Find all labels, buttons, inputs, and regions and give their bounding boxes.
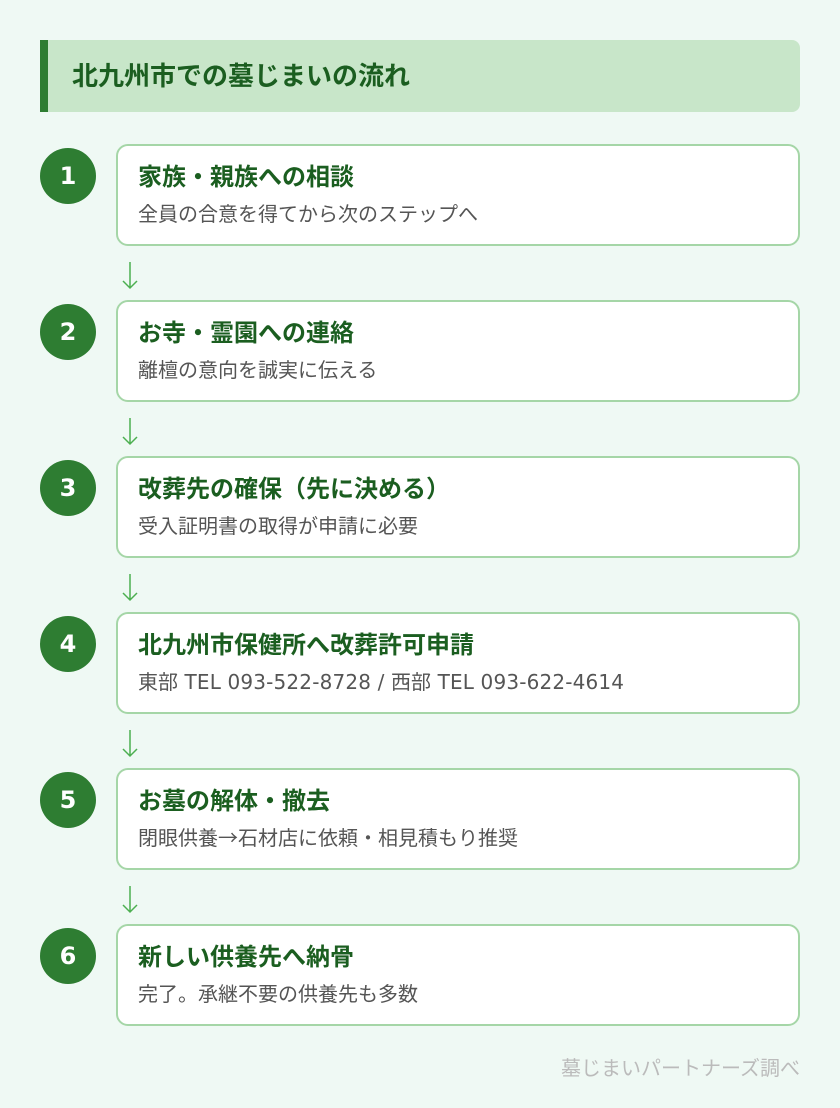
arrow 2 to 3	[122, 418, 138, 445]
step 4 number	[40, 616, 96, 672]
step 1 description: 全員の合意を得てから次のステップへ	[138, 198, 478, 227]
step 4 description: 東部 TEL 093-522-8728 / 西部 TEL 093-622-4614	[138, 666, 624, 695]
title: 北九州市での墓じまいの流れ	[72, 56, 410, 93]
step 3 number	[40, 460, 96, 516]
step 3 number: 3	[60, 474, 76, 502]
step 1 card	[116, 144, 800, 246]
step 5 description: 閉眼供養→石材店に依頼・相見積もり推奨	[138, 822, 518, 851]
step 5 card	[116, 768, 800, 870]
step 4 card	[116, 612, 800, 714]
step 3 card	[116, 456, 800, 558]
step 4 heading: 北九州市保健所へ改葬許可申請	[138, 625, 474, 660]
arrow 1 to 2	[122, 262, 138, 289]
step 3 description: 受入証明書の取得が申請に必要	[138, 510, 418, 539]
step 2 number	[40, 304, 96, 360]
step 6 heading: 新しい供養先へ納骨	[138, 937, 354, 972]
step 5 number	[40, 772, 96, 828]
title	[40, 40, 800, 112]
step 2 number: 2	[60, 318, 76, 346]
step 3 heading: 改葬先の確保（先に決める）	[138, 469, 450, 504]
step 5 number: 5	[60, 786, 76, 814]
step 2 card	[116, 300, 800, 402]
arrow 5 to 6	[122, 886, 138, 913]
step 4 number: 4	[60, 630, 76, 658]
step 1 heading: 家族・親族への相談	[138, 157, 354, 192]
arrow 4 to 5	[122, 730, 138, 757]
step 5 heading: お墓の解体・撤去	[138, 781, 330, 816]
step 2 description: 離檀の意向を誠実に伝える	[138, 354, 377, 383]
source note: 墓じまいパートナーズ調べ	[561, 1052, 800, 1081]
arrow 3 to 4	[122, 574, 138, 601]
step 6 number	[40, 928, 96, 984]
step 1 number	[40, 148, 96, 204]
step 6 description: 完了。承継不要の供養先も多数	[138, 978, 418, 1007]
step 6 card	[116, 924, 800, 1026]
step 6 number: 6	[60, 942, 76, 970]
step 1 number: 1	[60, 162, 76, 190]
step 2 heading: お寺・霊園への連絡	[138, 313, 354, 348]
